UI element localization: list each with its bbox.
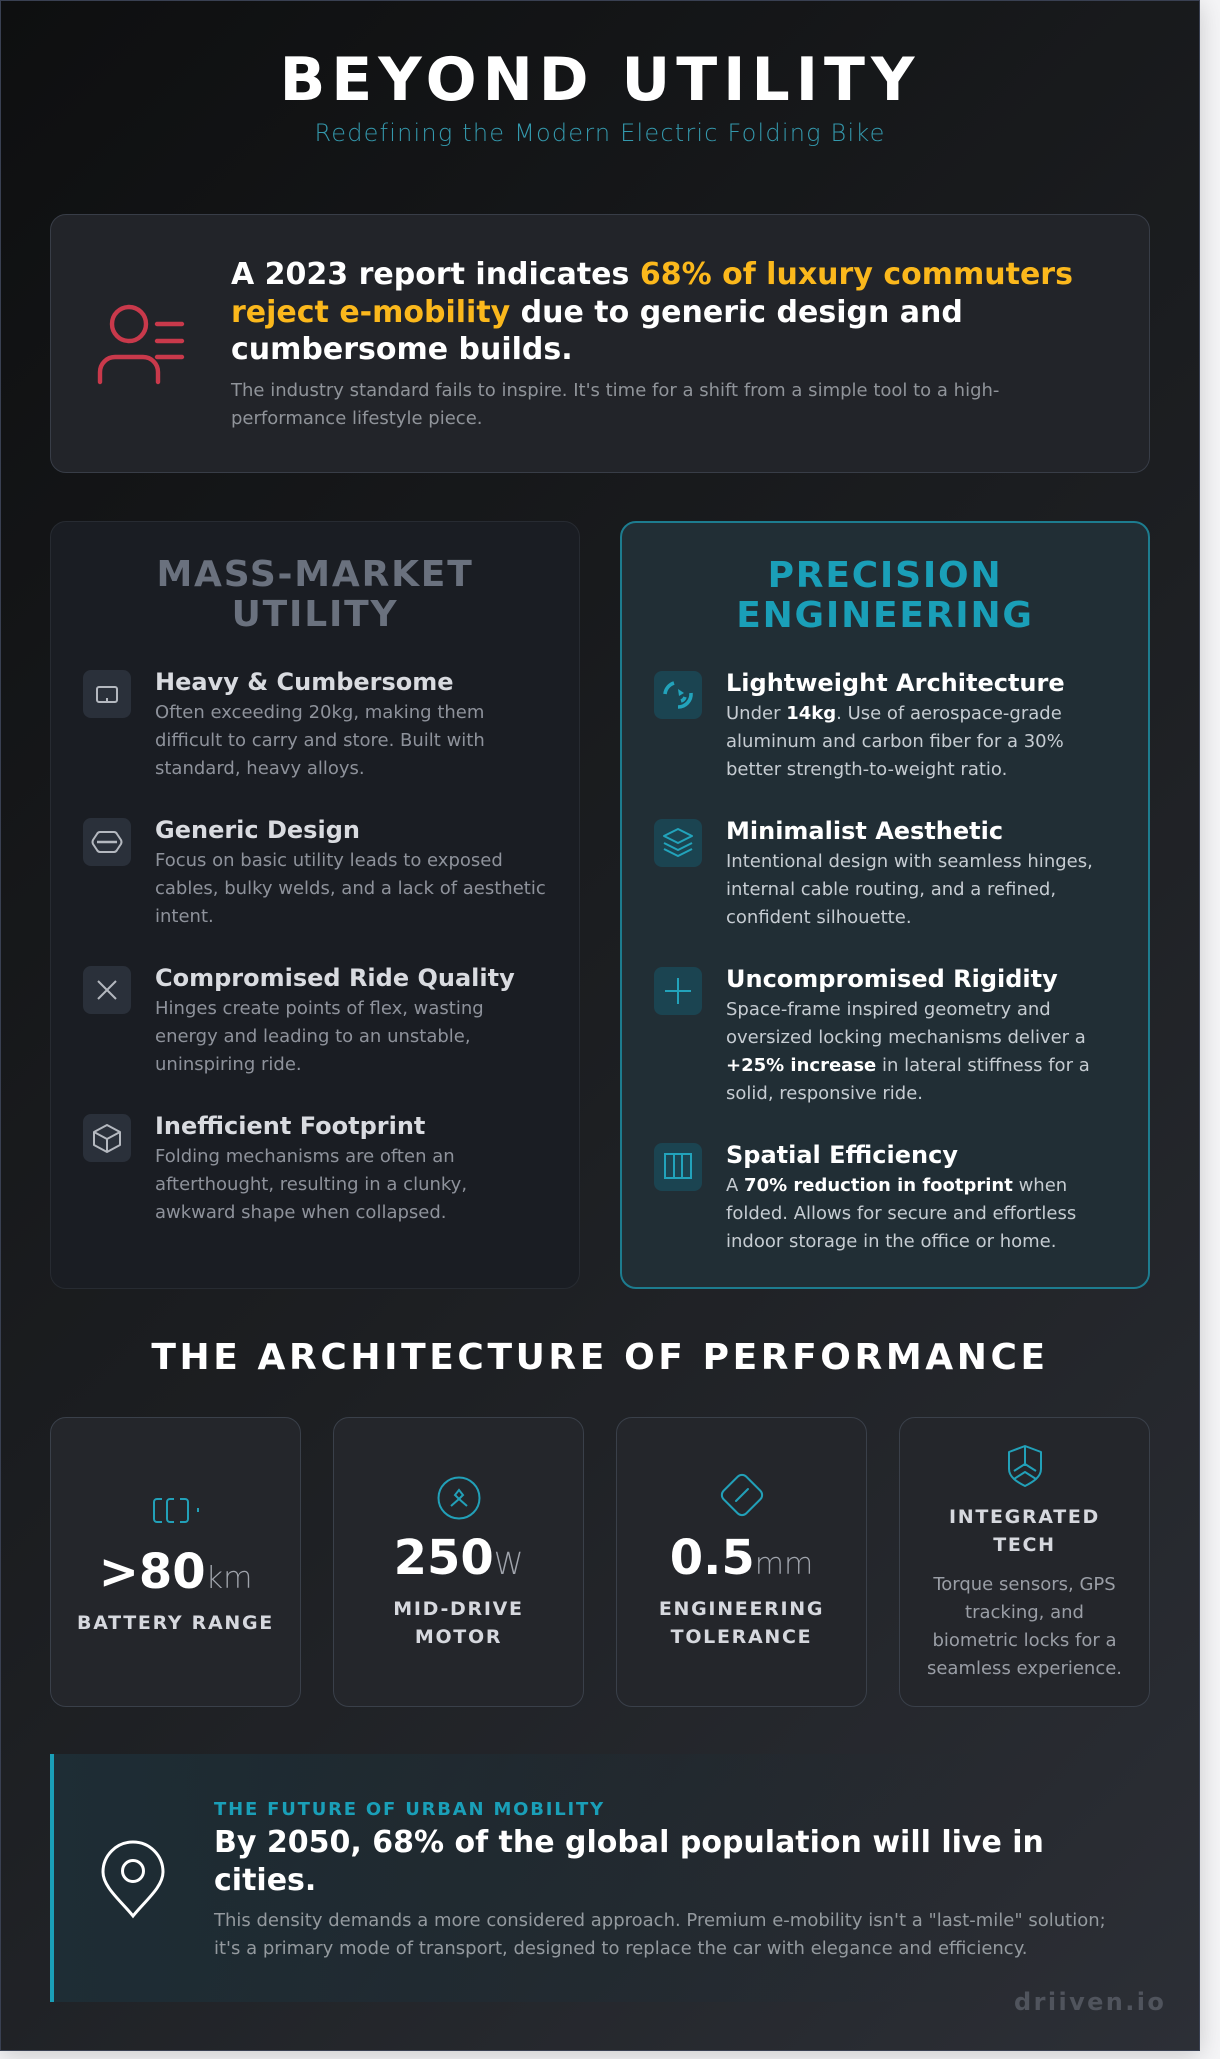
icon: person with list xyxy=(98,304,184,384)
title: BEYOND UTILITY xyxy=(280,45,920,115)
item text: aluminum and carbon fiber for a 30% xyxy=(726,731,1064,752)
item text xyxy=(726,965,1090,1104)
hero headline: A 2023 report indicates 68% of luxury commuters xyxy=(231,257,1073,292)
item text: Generic Design xyxy=(155,816,360,844)
item text xyxy=(155,816,546,927)
motor label: MID-DRIVE xyxy=(393,1598,524,1620)
motor label: MOTOR xyxy=(415,1626,502,1648)
item text: intent. xyxy=(155,906,214,927)
item text xyxy=(155,668,485,779)
item text: +25% increase in lateral stiffness for a xyxy=(726,1055,1090,1076)
future body text xyxy=(214,1910,1106,1959)
item text: afterthought, resulting in a clunky, xyxy=(155,1174,467,1195)
item text: Often exceeding 20kg, making them xyxy=(155,702,484,723)
section heading: THE ARCHITECTURE OF PERFORMANCE xyxy=(151,1337,1049,1378)
hero headline: reject e-mobility due to generic design and xyxy=(231,294,963,330)
item text: awkward shape when collapsed. xyxy=(155,1202,446,1223)
item: spatial xyxy=(654,1141,1076,1252)
tech description: seamless experience. xyxy=(927,1658,1122,1679)
item text: Heavy & Cumbersome xyxy=(155,668,454,696)
future body text: This density demands a more considered approach. Premium e-mobility isn't a "last-mile" solution; xyxy=(214,1910,1106,1931)
item text: uninspiring ride. xyxy=(155,1054,302,1075)
item text: Minimalist Aesthetic xyxy=(726,817,1003,845)
panel: hero statistic xyxy=(50,214,1150,473)
item text xyxy=(155,964,515,1075)
stat card: tolerance xyxy=(616,1417,867,1707)
tech description: biometric locks for a xyxy=(932,1630,1117,1651)
tolerance value: 0.5mm xyxy=(670,1530,813,1586)
item text: A 70% reduction in footprint when xyxy=(726,1175,1067,1196)
item text: confident silhouette. xyxy=(726,907,912,928)
tolerance label xyxy=(659,1598,824,1648)
item: ride quality xyxy=(83,964,515,1075)
icon: map pin xyxy=(102,1840,164,1918)
item text: Lightweight Architecture xyxy=(726,669,1065,697)
icon: cube xyxy=(83,1114,131,1162)
hero body text: The industry standard fails to inspire. It's time for a shift from a simple tool to a high- xyxy=(231,380,999,401)
item text: Hinges create points of flex, wasting xyxy=(155,998,484,1019)
item: minimalist xyxy=(654,817,1093,928)
stat card: motor xyxy=(333,1417,584,1707)
item text: Focus on basic utility leads to exposed xyxy=(155,850,503,871)
item text: difficult to carry and store. Built with xyxy=(155,730,485,751)
tech description: tracking, and xyxy=(965,1602,1084,1623)
subtitle: Redefining the Modern Electric Folding Bike xyxy=(314,119,886,147)
tech label: INTEGRATED xyxy=(949,1506,1100,1528)
icon: cross xyxy=(83,966,131,1014)
hero body text: performance lifestyle piece. xyxy=(231,408,482,429)
stat card: integrated tech xyxy=(899,1417,1150,1707)
future body text: it's a primary mode of transport, designed to replace the car with elegance and efficiency. xyxy=(214,1938,1028,1959)
tech description: Torque sensors, GPS xyxy=(933,1574,1116,1595)
icon: columns xyxy=(654,1143,702,1191)
future headline: By 2050, 68% of the global population will live in xyxy=(214,1825,1044,1860)
item text xyxy=(155,1112,467,1223)
item text xyxy=(726,669,1065,780)
tolerance label: TOLERANCE xyxy=(671,1626,812,1648)
item text xyxy=(726,1141,1076,1252)
icon: hexagon xyxy=(83,818,131,866)
item text: folded. Allows for secure and effortless xyxy=(726,1203,1076,1224)
hero body text xyxy=(230,380,999,429)
item: heavy xyxy=(83,668,485,779)
tech label xyxy=(949,1506,1100,1556)
column heading: PRECISION xyxy=(768,555,1002,596)
item text: Compromised Ride Quality xyxy=(155,964,515,992)
icon: motor xyxy=(438,1476,480,1520)
motor value: 250W xyxy=(394,1530,523,1586)
battery value: >80km xyxy=(99,1544,252,1600)
tolerance label: ENGINEERING xyxy=(659,1598,824,1620)
item text: solid, responsive ride. xyxy=(726,1083,923,1104)
icon: tablet xyxy=(83,670,131,718)
icon: shield xyxy=(1008,1445,1042,1487)
item: lightweight xyxy=(654,669,1065,780)
icon: tolerance xyxy=(720,1474,764,1516)
tech description xyxy=(927,1574,1122,1679)
item text: Under 14kg. Use of aerospace-grade xyxy=(726,703,1062,724)
item text: Spatial Efficiency xyxy=(726,1141,958,1169)
column heading xyxy=(736,555,1034,636)
item: rigidity xyxy=(654,965,1090,1104)
icon: rotating arcs xyxy=(654,671,702,719)
item text: cables, bulky welds, and a lack of aesthetic xyxy=(155,878,546,899)
panel: mass-market utility xyxy=(50,521,580,1289)
panel: future of urban mobility xyxy=(50,1754,1150,2002)
panel: precision engineering xyxy=(620,521,1150,1289)
item text: standard, heavy alloys. xyxy=(155,758,365,779)
future headline: cities. xyxy=(214,1862,316,1898)
item text: energy and leading to an unstable, xyxy=(155,1026,471,1047)
item text: Space-frame inspired geometry and xyxy=(726,999,1051,1020)
item text: Uncompromised Rigidity xyxy=(726,965,1058,993)
column heading: MASS-MARKET xyxy=(156,554,474,595)
icon: battery xyxy=(153,1498,199,1523)
item text: oversized locking mechanisms deliver a xyxy=(726,1027,1086,1048)
hero headline: cumbersome builds. xyxy=(231,332,573,367)
hero headline xyxy=(231,257,1073,367)
icon: plus xyxy=(654,967,702,1015)
item text: Intentional design with seamless hinges, xyxy=(726,851,1093,872)
watermark: driiven.io xyxy=(1014,1988,1166,2016)
motor label xyxy=(393,1598,524,1648)
item text: Folding mechanisms are often an xyxy=(155,1146,455,1167)
item text: better strength-to-weight ratio. xyxy=(726,759,1007,780)
item text: indoor storage in the office or home. xyxy=(726,1231,1056,1252)
column heading: UTILITY xyxy=(232,594,398,635)
stat card: battery xyxy=(50,1417,301,1707)
item text: Inefficient Footprint xyxy=(155,1112,425,1140)
item text xyxy=(726,817,1093,928)
icon: layers xyxy=(654,819,702,867)
eyebrow: THE FUTURE OF URBAN MOBILITY xyxy=(214,1799,605,1820)
item: generic xyxy=(83,816,546,927)
item: footprint xyxy=(83,1112,467,1223)
item text: internal cable routing, and a refined, xyxy=(726,879,1056,900)
column heading: ENGINEERING xyxy=(736,595,1034,636)
tech label: TECH xyxy=(993,1534,1056,1556)
future headline xyxy=(214,1825,1044,1898)
battery label: BATTERY RANGE xyxy=(77,1612,274,1634)
column heading xyxy=(156,554,474,635)
